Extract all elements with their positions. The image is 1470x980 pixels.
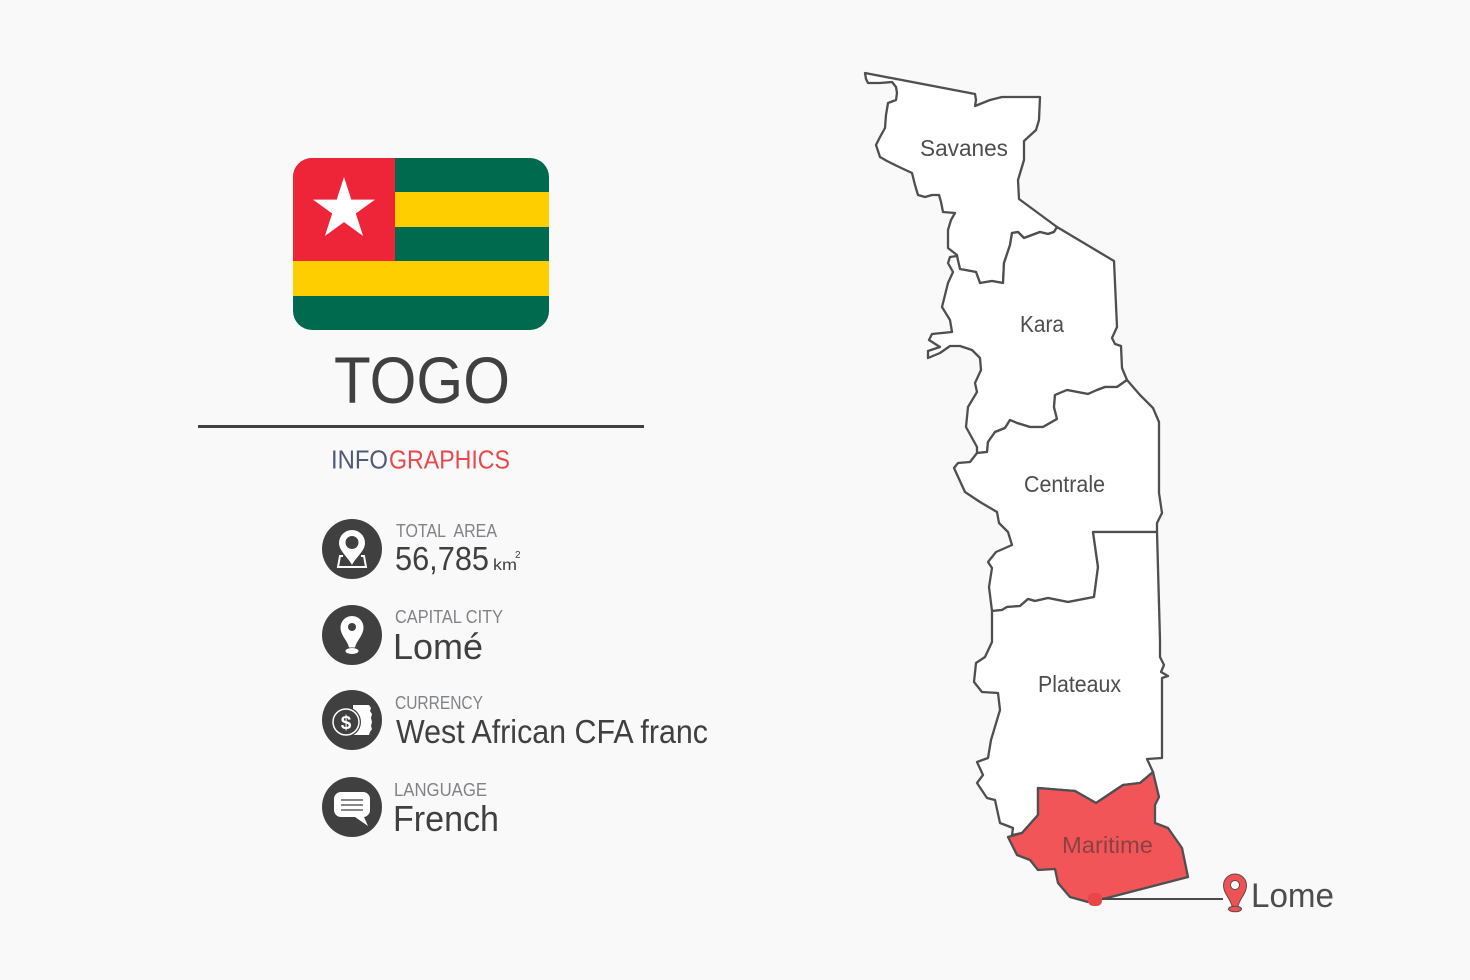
region: Centrale [954,380,1162,611]
flag of Togo [293,158,549,330]
region: Savanes [865,73,1057,283]
capital marker dot [1088,893,1102,906]
region labels [920,135,1153,858]
value: French [393,798,499,839]
fact: language [322,777,499,839]
title: TOGO [334,343,510,417]
region: Plateaux [974,532,1168,835]
unit: km [493,557,517,574]
fact: total area: 2 [515,550,521,561]
region labels: Kara [1020,311,1064,337]
icon: map pin on map [322,519,382,579]
value: Lomé [393,626,483,667]
region labels: Savanes [920,135,1008,161]
icon: coins: $ [341,713,352,734]
region: Maritime (highlighted) [1008,772,1188,902]
fact: currency [322,690,708,750]
icon: speech bubble [322,777,382,837]
label: TOTAL AREA [396,521,497,541]
fact: total area [322,519,521,579]
subtitle: INFO [331,444,388,474]
capital label: Lome [1251,877,1334,915]
map of Togo [865,73,1188,902]
icon: location pin [322,605,382,665]
label: CAPITAL CITY [395,607,503,627]
subtitle [331,444,510,474]
region: Kara [928,227,1127,453]
region labels: Centrale [1024,471,1105,497]
label: CURRENCY [395,693,483,713]
icon: coins [322,690,382,750]
value: West African CFA franc [396,713,708,750]
region labels: Plateaux [1038,671,1121,697]
title underline [198,425,644,428]
icon: red pin [1224,874,1246,912]
fact: capital city [322,605,503,667]
subtitle: GRAPHICS [389,444,510,474]
leader line to Lome [1102,898,1223,900]
label: LANGUAGE [394,780,487,800]
value: 56,785 [395,540,489,577]
region labels: Maritime [1062,832,1153,858]
